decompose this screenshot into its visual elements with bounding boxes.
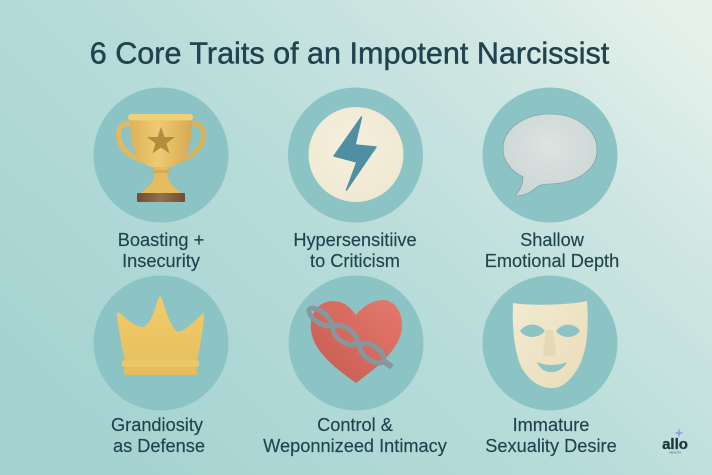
panel: hypersensitive to criticism <box>288 88 423 271</box>
label: boasting + insecurity <box>118 230 204 271</box>
label: grandiosity as defense: as Defense <box>113 436 205 456</box>
label: control and weaponized intimacy: Weponnizeed Intimacy <box>263 436 448 456</box>
title: 6 Core Traits of an Impotent Narcissist <box>90 36 610 70</box>
label: control and weaponized intimacy: Control & <box>317 415 393 435</box>
panel: immature sexuality desire <box>482 276 618 456</box>
chain <box>306 305 392 367</box>
panel: grandiosity as defense <box>94 276 228 456</box>
label: boasting + insecurity: Boasting + <box>118 230 204 250</box>
icon: lightning disc <box>308 107 404 202</box>
logo: allo health: allo <box>662 436 688 453</box>
label: hypersensitive to criticism: to Criticism <box>310 251 400 271</box>
label: immature sexuality desire: Immature <box>513 415 589 435</box>
panel: shallow emotional depth <box>482 88 619 271</box>
label: shallow emotional depth: Emotional Depth <box>485 251 619 271</box>
label: grandiosity as defense <box>111 415 205 456</box>
logo: allo health: HEALTH <box>669 450 681 454</box>
panel: boasting + insecurity <box>94 88 228 271</box>
icon: chained heart <box>306 300 402 383</box>
label: immature sexuality desire: Sexuality Desire <box>485 436 617 456</box>
icon: speech bubble <box>503 114 597 196</box>
label: control and weaponized intimacy <box>263 415 448 456</box>
icon: crown <box>117 297 204 375</box>
label: immature sexuality desire <box>485 415 617 456</box>
panel: control and weaponized intimacy <box>263 276 448 456</box>
label: hypersensitive to criticism <box>293 230 417 271</box>
label: grandiosity as defense: Grandiosity <box>111 415 204 435</box>
logo: allo health <box>662 428 688 454</box>
label: shallow emotional depth <box>485 230 619 271</box>
label: boasting + insecurity: Insecurity <box>122 251 201 271</box>
icon: mask <box>513 301 588 388</box>
label: shallow emotional depth: Shallow <box>520 230 585 250</box>
icon: trophy <box>119 114 203 202</box>
label: hypersensitive to criticism: Hypersensitiive <box>293 230 417 250</box>
